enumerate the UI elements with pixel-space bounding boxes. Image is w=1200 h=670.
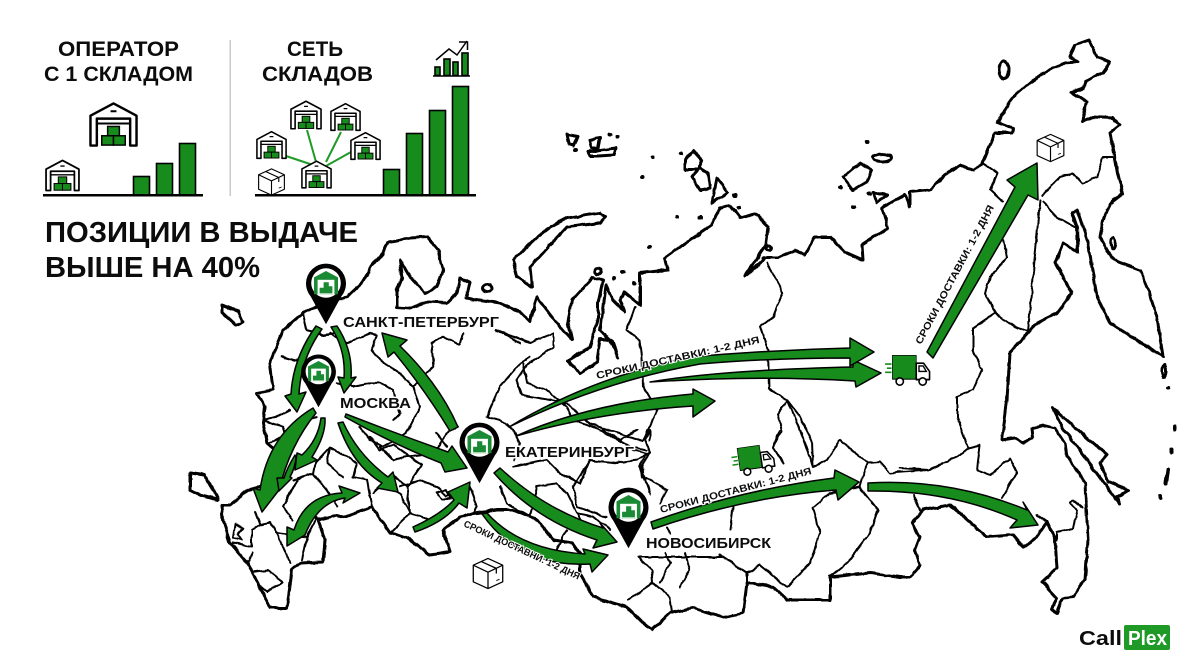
arrow: Moscow to Yekaterinburg [345,414,467,472]
city pin: Novosibirsk [608,488,648,548]
headline: ВЫШЕ НА 40% [45,252,260,284]
divider [230,40,231,196]
icon: truck, Siberia [885,355,930,385]
delivery time label: Far East: СРОКИ ДОСТАВКИ: 1-2 ДНЯ [914,204,997,346]
icon: large warehouse [90,103,137,146]
mainland outline [222,40,1163,630]
city label: Moscow: МОСКВА [340,395,411,412]
panel: single warehouse operator [43,38,203,196]
icon: warehouse top left [291,101,321,129]
icon: warehouse centre [302,161,331,188]
network connection lines [286,130,351,166]
arrow: Yekaterinburg to Saint Petersburg [382,333,458,431]
bar chart: small growth [43,144,203,196]
city label: Novosibirsk: НОВОСИБИРСК [646,535,772,552]
regional borders: Siberia and Far East [500,157,1113,613]
delivery time label: south Urals: СРОКИ ДОСТАВНИ: 1-2 ДНЯ [462,519,582,582]
heading: network: СКЛАДОВ [262,63,373,86]
arrows: Moscow to the south [253,408,398,512]
regional borders: south of European Russia [233,420,430,592]
icon: small warehouse [46,160,79,191]
icon: parcel, south Urals [473,558,503,589]
city label: Yekaterinburg: ЕКАТЕРИНБУРГ [505,444,635,461]
logo: CallPlex: Call [1079,628,1122,650]
arrow: Yekaterinburg to truck upper [509,338,874,427]
icon: growth chart [433,41,470,76]
heading: network: СЕТЬ [287,38,343,61]
arrow: truck to Far East parcel [927,163,1038,358]
heading: operator: ОПЕРАТОР [58,38,179,61]
headline [45,217,358,284]
panel: warehouse network [255,38,476,196]
logo: CallPlex [1079,625,1170,650]
city pin: Yekaterinburg [460,423,500,483]
arrow: Yekaterinburg eastwards [516,389,715,436]
arrows: Saint Petersburg to Moscow [285,326,356,412]
arrow: branch to truck lower [650,360,881,387]
icon: parcel, Far East [1037,134,1064,162]
icon: parcel [259,169,284,195]
icon: warehouse top right [331,104,360,130]
regional borders: European Russia [263,315,650,550]
delivery time label: west Siberia: СРОКИ ДОСТАВКИ: 1-2 ДНЯ [595,335,761,382]
heading: operator [44,38,193,86]
icon: truck, Baikal area [730,444,776,477]
logo: CallPlex: Plex [1128,628,1167,650]
city pin: Saint Petersburg [306,264,346,324]
map of Russia [190,40,1175,630]
heading: operator: С 1 СКЛАДОМ [44,63,193,86]
delivery time label: Novosibirsk east: СРОКИ ДОСТАВКИ: 1-2 ДНЯ [659,466,813,516]
headline: ПОЗИЦИИ В ВЫДАЧЕ [45,217,358,249]
arrow: Yekaterinburg lower curve [482,513,608,572]
heading: network [262,38,373,86]
arrow: lower Volga to Yekaterinburg [413,482,470,532]
arrow: Novosibirsk eastwards [651,470,859,529]
islands: Crimea, Kaliningrad, Novaya Zemlya, Sakhalin and the Arctic [190,61,1175,505]
bar chart: large growth [255,86,476,196]
city label: Saint Petersburg: САНКТ-ПЕТЕРБУРГ [343,314,500,331]
icon: warehouse right [351,133,380,159]
arrow: to Khabarovsk region [868,482,1038,528]
city pin: Moscow [301,355,336,407]
icon: warehouse left [257,132,286,158]
arrow: double headed, south Russia [287,486,360,546]
arrow: Yekaterinburg to Novosibirsk [494,468,617,548]
